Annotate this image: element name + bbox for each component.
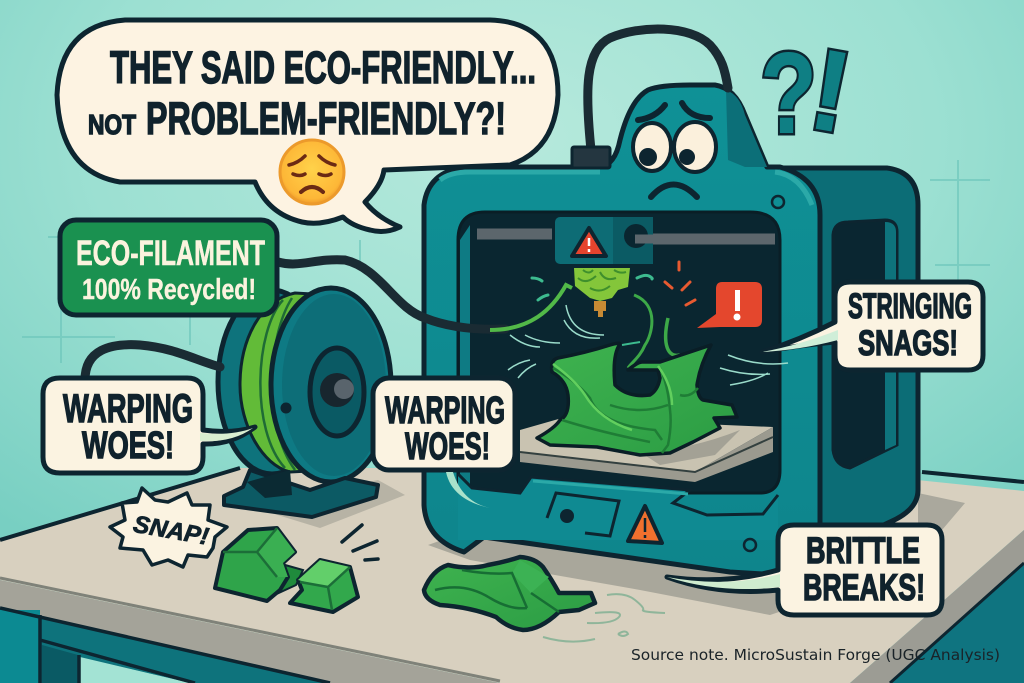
power plug (572, 147, 610, 168)
green filament into nozzle (490, 285, 572, 330)
melted puddle (424, 557, 595, 630)
cable from spool to warping label (85, 345, 220, 380)
question exclamation marks: ? (760, 28, 817, 158)
snap motion marks (342, 525, 378, 560)
filament cable (278, 260, 505, 329)
broken green chunks (215, 528, 358, 612)
warping label center (373, 378, 515, 470)
brittle label: BRITTLE (806, 530, 920, 571)
question exclamation marks (760, 23, 861, 158)
face (633, 103, 716, 197)
clogged nozzle (574, 268, 630, 301)
motion swoosh under warping label (446, 472, 490, 508)
headline: THEY SAID ECO-FRIENDLY... (110, 42, 536, 93)
eco filament label: 100% Recycled! (82, 274, 256, 306)
side window (833, 220, 897, 468)
spool front disk (271, 288, 391, 482)
question exclamation marks: ! (801, 23, 861, 158)
printer side panel (760, 168, 918, 575)
filament strands (628, 295, 652, 368)
warping label left: WARPING (63, 387, 193, 431)
filament squiggles (543, 594, 665, 642)
table (0, 468, 1024, 683)
alert speech icon (697, 282, 762, 328)
warning triangle top (572, 228, 606, 256)
brittle label (667, 525, 942, 615)
rods (477, 228, 552, 240)
snap burst (110, 488, 227, 567)
warping label center: WARPING (385, 390, 505, 432)
source note: Source note. MicroSustain Forge (UGC Analysis) (631, 646, 1000, 664)
stringing label (762, 282, 983, 370)
speech bubble (57, 20, 558, 231)
warping label left: WOES! (82, 425, 174, 467)
eco filament label (60, 220, 277, 315)
brittle label: BREAKS! (803, 567, 925, 608)
printer shadow (428, 530, 815, 615)
eco filament label: ECO-FILAMENT (76, 234, 265, 273)
bed (520, 418, 773, 472)
warping label left (43, 378, 255, 473)
speech bubble: PROBLEM-FRIENDLY?! (146, 93, 506, 144)
printer body (424, 85, 820, 575)
stringing label: SNAGS! (858, 324, 958, 363)
snap burst: SNAP! (131, 511, 211, 551)
lower bezel (458, 474, 778, 540)
warning triangle bottom (628, 506, 662, 543)
sad emoji (280, 140, 344, 204)
printer (424, 85, 918, 575)
carriage (555, 217, 653, 264)
warping label center: WOES! (405, 426, 490, 468)
print chamber (458, 212, 780, 493)
power cable (588, 29, 728, 150)
warped print (537, 343, 737, 455)
front panel (547, 493, 619, 536)
spool (218, 288, 391, 517)
speech bubble: NOT (88, 109, 136, 140)
